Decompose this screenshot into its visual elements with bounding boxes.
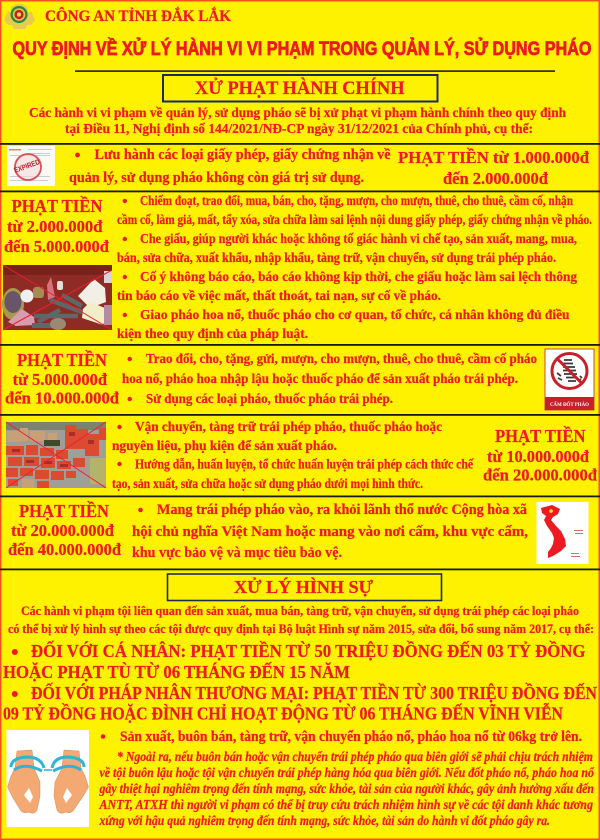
text: bullet <box>132 502 528 561</box>
penalties for individuals <box>3 641 586 682</box>
administrative intro text: tại Điều 11, Nghị định số 144/2021/NĐ-CP ngày 31/12/2021 của Chính phủ, cụ thể: <box>65 121 533 136</box>
fine amount: đến 5.000.000đ <box>4 237 110 256</box>
text: bullets <box>117 194 592 342</box>
icon: map of Vietnam <box>536 502 588 564</box>
fine amount: đến 2.000.000đ <box>443 169 549 188</box>
fine amount: PHẠT TIỀN <box>17 349 107 370</box>
fine amount <box>4 195 110 256</box>
panel: fine 2,000,000 to 5,000,000 <box>2 194 592 342</box>
panel: fine 1,000,000 to 2,000,000 <box>7 146 590 188</box>
heading: criminal handling: XỬ LÝ HÌNH SỰ <box>234 576 374 597</box>
text: bullet: quản lý, sử dụng pháo không còn giá trị sử dụng. <box>69 170 364 186</box>
text: bullets: Hướng dẫn, huấn luyện, tổ chức huấn luyện trái phép cách thức chế <box>135 456 474 472</box>
fine amount: từ 10.000.000đ <box>487 447 590 466</box>
penalties for individuals: ĐỐI VỚI CÁ NHÂN: PHẠT TIỀN TỪ 50 TRIỆU ĐỒNG ĐẾN 03 TỶ ĐỒNG <box>31 641 586 661</box>
fine amount: đến 10.000.000đ <box>5 388 120 408</box>
text: bullets: nguyên liệu, phụ kiện để sản xuất pháo. <box>112 439 337 454</box>
icon: no firecrackers sign <box>545 349 594 410</box>
fine amount <box>398 148 590 188</box>
fine amount: đến 20.000.000đ <box>483 466 598 484</box>
fine amount: PHẠT TIỀN <box>19 500 109 521</box>
text: bullets: Sử dụng các loại pháo, thuốc pháo trái phép. <box>146 392 393 407</box>
fine amount: từ 5.000.000đ <box>13 370 108 389</box>
text: bullets: Trao đổi, cho, tặng, gửi, mượn, cho mượn, thuê, cho thuê, cầm cố pháo <box>146 352 537 367</box>
heading: administrative penalties: XỬ PHẠT HÀNH CHÍNH <box>195 77 405 99</box>
photo: seized firecrackers <box>6 422 106 488</box>
fine amount <box>5 349 120 408</box>
penalties for individuals: HOẶC PHẠT TÙ TỪ 06 THÁNG ĐẾN 15 NĂM <box>3 662 350 682</box>
text: bullet: khu vực bảo vệ và mục tiêu bảo vệ. <box>132 545 342 561</box>
text: bullets: kiện theo quy định của pháp luật. <box>117 327 308 342</box>
text: criminal offence: Sản xuất, buôn bán, tàng trữ, vận chuyển pháo nổ, pháo hoa nổ từ 06kg trở lên. <box>120 729 582 745</box>
administrative intro text <box>29 105 566 136</box>
text: bullets: hoa nổ, pháo hoa nhập lậu hoặc thuốc pháo để sản xuất pháo trái phép. <box>122 372 518 387</box>
text: bullets <box>122 352 537 407</box>
fine amount: PHẠT TIỀN từ 1.000.000đ <box>398 148 590 167</box>
organisation name: CÔNG AN TỈNH ĐẮK LẮK <box>45 7 231 25</box>
text: bullet <box>69 147 391 186</box>
text: bullet: Lưu hành các loại giấy phép, giấy chứng nhận về <box>94 147 391 163</box>
icon: expired certificate <box>7 146 55 186</box>
panel: fine 20,000,000 to 40,000,000 <box>8 500 588 564</box>
icon: police emblem <box>4 4 35 29</box>
fine amount: PHẠT TIỀN <box>12 195 102 216</box>
note: additional liability <box>99 749 595 828</box>
fine amount: từ 20.000.000đ <box>11 521 115 540</box>
heading: administrative penalties <box>163 75 438 102</box>
fine amount <box>8 500 122 559</box>
panel: fine 5,000,000 to 10,000,000 <box>5 349 594 410</box>
photo: seized firecracker materials <box>2 265 112 330</box>
text: bullets <box>112 420 474 492</box>
penalties for commercial legal entities <box>3 683 597 724</box>
heading: criminal handling <box>168 574 442 600</box>
text: bullets: Giao pháo hoa nổ, thuốc pháo cho cơ quan, tổ chức, cá nhân không đủ điều <box>140 308 570 323</box>
icon: handcuffed hands <box>6 730 89 827</box>
administrative intro text: Các hành vi vi phạm về quản lý, sử dụng pháo sẽ bị xử phạt vi phạm hành chính theo quy định <box>29 105 566 120</box>
criminal intro text <box>8 603 594 636</box>
icon: no firecrackers sign: CẤM ĐỐT PHÁO <box>550 400 590 408</box>
text: bullets: Vận chuyển, tàng trữ trái phép pháo, thuốc pháo hoặc <box>135 420 442 435</box>
panel: fine 10,000,000 to 20,000,000 <box>6 420 598 492</box>
text: bullets: tạo, sản xuất, sửa chữa hoặc sử dụng pháo dưới mọi hình thức. <box>112 477 423 492</box>
text: bullet: Mang trái phép pháo vào, ra khỏi lãnh thổ nước Cộng hòa xã <box>157 502 528 518</box>
icon: expired certificate: EXPIRED <box>13 157 41 175</box>
fine amount: đến 40.000.000đ <box>8 540 122 559</box>
text: bullet: hội chủ nghĩa Việt Nam hoặc mang vào nơi cấm, khu vực cấm, <box>132 524 528 540</box>
text: bullets: Cố ý không báo cáo, báo cáo không kịp thời, che giấu hoặc làm sai lệch thông <box>140 270 577 285</box>
fine amount <box>483 425 598 484</box>
fine amount: từ 2.000.000đ <box>7 217 103 236</box>
text: bullets: tin báo cáo về việc mất, thất thoát, tai nạn, sự cố về pháo. <box>117 289 441 304</box>
fine amount: PHẠT TIỀN <box>495 425 586 446</box>
